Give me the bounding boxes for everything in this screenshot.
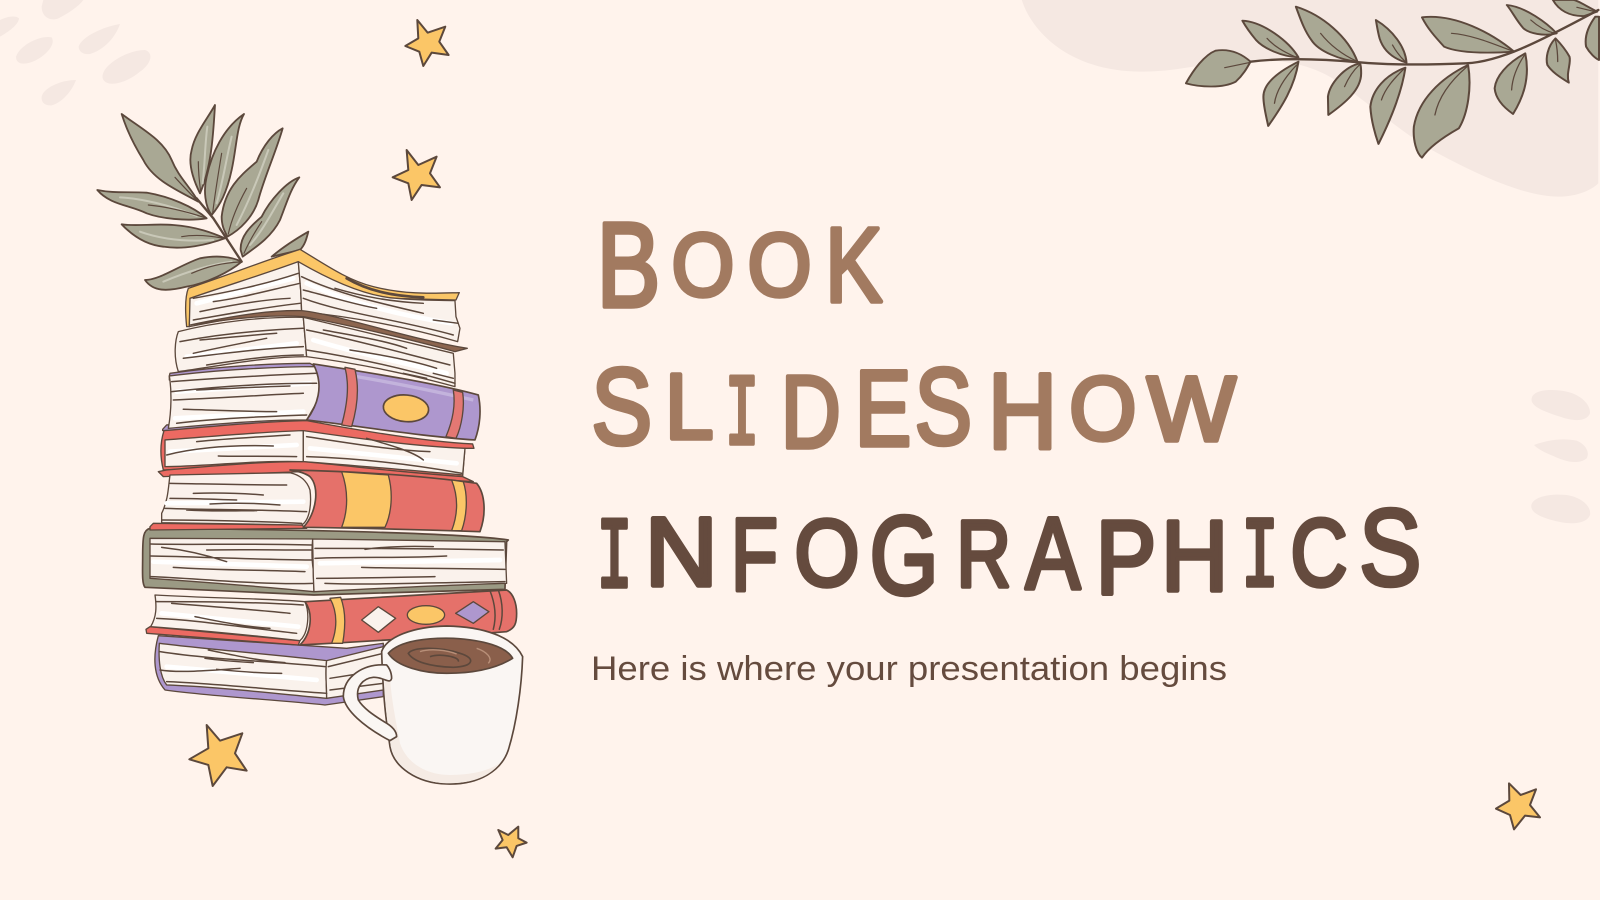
- title line: Infographics: C: [1290, 499, 1348, 606]
- title line: Slideshow: H: [988, 352, 1057, 472]
- title line: Infographics: R: [956, 502, 1011, 608]
- illustration: stack of books with plant and stars, upper part: [97, 105, 480, 482]
- icon: star: [393, 150, 440, 200]
- illustration: stack of books with coffee cup and stars, lower part: [143, 470, 527, 857]
- title line: Infographics: O: [794, 501, 860, 606]
- icon: star bottom right: [1496, 783, 1540, 829]
- title line: Infographics: P: [1096, 500, 1156, 616]
- title line: Infographics: A: [1026, 496, 1080, 610]
- book: red cover with diamonds: [146, 590, 517, 645]
- background blob: top right: [1022, 0, 1598, 197]
- book: green cover, large: [143, 528, 508, 595]
- book: brown cover: [175, 311, 467, 387]
- leaf branch: top right: [1186, 0, 1599, 158]
- icon: coffee cup: [343, 626, 523, 784]
- title line: Infographics: I: [1241, 504, 1279, 616]
- title line: Slideshow: D: [781, 354, 841, 470]
- title line: Book: O: [672, 215, 734, 314]
- subtitle: Here is where your presentation begins: [591, 650, 1227, 688]
- title line: Infographics: H: [1161, 500, 1228, 612]
- title line: Book: O: [748, 215, 812, 314]
- icon: small star: [496, 827, 527, 857]
- book: thin red cover: [158, 421, 474, 482]
- title line: Slideshow: I: [725, 360, 759, 474]
- title line: Slideshow: L: [665, 354, 714, 458]
- title line: Infographics: F: [731, 498, 778, 612]
- title line: Slideshow: O: [1069, 358, 1137, 459]
- title line: Book: B: [596, 198, 660, 332]
- book: yellow cover: [186, 249, 460, 342]
- title line: Infographics: N: [645, 498, 718, 606]
- decorative spots: right edge: [1531, 390, 1590, 523]
- icon: star: [189, 725, 247, 786]
- icon: plant sprig: [97, 105, 308, 290]
- title line: Slideshow: W: [1147, 358, 1236, 460]
- book: purple cover, bottom: [155, 636, 383, 705]
- title line: Infographics: S: [1359, 487, 1421, 608]
- title line: Slideshow: S: [915, 346, 972, 467]
- title line: Slideshow: E: [855, 348, 911, 468]
- title line: Slideshow: S: [591, 346, 652, 467]
- icon: star top: [405, 20, 449, 66]
- book: red cover with yellow band: [150, 470, 484, 532]
- title line: Infographics: G: [870, 493, 938, 618]
- title line: Book: K: [825, 206, 882, 324]
- title line: Infographics: I: [596, 502, 632, 618]
- book: purple cover with oval emblem: [163, 363, 480, 440]
- decorative spots: top left: [0, 0, 150, 105]
